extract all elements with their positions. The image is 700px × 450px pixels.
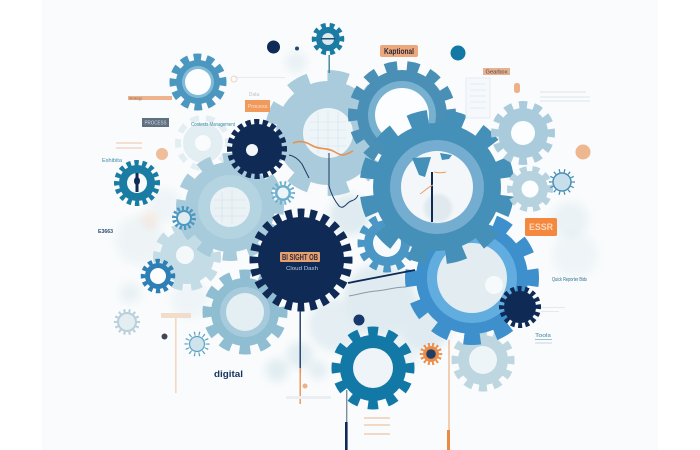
connector: bottom orange vertical [447, 340, 450, 450]
icon: peach dot lower [302, 384, 308, 388]
icon: navy dot top [267, 40, 280, 54]
gear: bright blue ring gear [411, 217, 533, 339]
connector: vertical inside big gear [431, 172, 433, 222]
faint background cloud of gears [116, 52, 597, 381]
text: lower right caption [535, 333, 552, 344]
gear: teal bottom centre [336, 331, 410, 405]
label: orange bar left [128, 96, 172, 100]
label: tan top right [483, 68, 510, 76]
gear: small navy right [502, 289, 538, 325]
gear: small sun left [174, 208, 194, 228]
gear: small blue behind [361, 217, 413, 269]
label on navy gear: BI SIGHT OB [282, 253, 318, 262]
connector: navy squiggle centre [329, 153, 358, 207]
gear: navy large centre [254, 213, 348, 307]
gear: navy toothed upper [230, 122, 284, 176]
connector: orange curve on pale gear [293, 142, 353, 155]
label: grey box [142, 118, 169, 127]
gear: faint upper left [178, 118, 228, 168]
connector: faint left label rule [161, 313, 191, 318]
label: orange left of gear [245, 92, 270, 112]
gear: sun lower left blue [186, 334, 208, 354]
label on navy gear [280, 252, 320, 272]
label: tan top right: Gearbox [486, 70, 508, 76]
text: lower right caption: Tools [535, 333, 552, 339]
icon: small dot top [295, 46, 299, 50]
text block: faint lines top right [540, 91, 590, 102]
connector: grey wire [349, 287, 406, 296]
text block: faint table [466, 78, 490, 118]
label: orange left of gear: Data [249, 92, 259, 98]
label: Kaptional: Kaptional [384, 47, 414, 56]
text: teal caption: Contexts Management [191, 122, 236, 128]
connector: orange squiggle inside big gear [420, 172, 446, 194]
icon: teal dot top [450, 46, 466, 60]
icon: dark dot lower left [162, 334, 168, 340]
gear: faint sun lower left [116, 311, 138, 333]
text block: faint label upper [231, 76, 285, 82]
gear: left teal [117, 163, 157, 203]
label: Kaptional [380, 45, 418, 57]
connector: vertical navy to orange [300, 311, 301, 404]
gear: pale left middle [157, 227, 217, 287]
text block: faint orange left [116, 142, 142, 149]
text: teal small left: Eshibita [102, 158, 122, 164]
gear: blue top [353, 66, 451, 164]
label: orange bar left: Strategy [129, 96, 142, 100]
label: grey box: PROCESS [144, 120, 167, 126]
text: navy small left: E3663 [98, 229, 113, 235]
gear: small sun centre [273, 183, 293, 203]
icon: orange sun [422, 344, 440, 364]
gear: blue upper left [173, 57, 223, 107]
icon: navy dot lower [354, 314, 364, 326]
connector: navy squiggle top [289, 155, 309, 178]
connector: bottom grey navy vertical [345, 390, 348, 450]
text block: grey rule bottom [286, 396, 331, 399]
gear: blue small left [143, 261, 173, 291]
gear: pale centre top [271, 76, 385, 190]
text: right caption: Quick Reporter Bids [552, 277, 587, 283]
gear: pale right lower [510, 169, 550, 209]
label on navy gear: Cloud Dash [286, 266, 318, 272]
icon: small peach badge [514, 83, 520, 93]
gear: pale lower right [455, 332, 511, 388]
label: orange right: ESSR [529, 222, 553, 232]
label: orange right [525, 218, 557, 236]
badge: peach left [156, 148, 168, 160]
gear: right sun [551, 171, 573, 193]
gear: pale left large [181, 158, 279, 256]
label: orange left of gear: Process [248, 104, 268, 110]
gear: top teal [314, 25, 342, 53]
gear: largest blue [367, 117, 507, 257]
gear: pale right upper [495, 105, 551, 161]
text block: right small rules [541, 307, 565, 312]
connector: faint orange stem left [175, 318, 177, 393]
connector: top gear stem [328, 55, 330, 73]
badge: orange right [576, 144, 590, 160]
text: digital: digital [214, 369, 243, 379]
text block: under teal gear [364, 417, 390, 435]
connector: navy gear to ring gear [348, 270, 415, 283]
gear: left-mid pale bottom [207, 274, 283, 350]
